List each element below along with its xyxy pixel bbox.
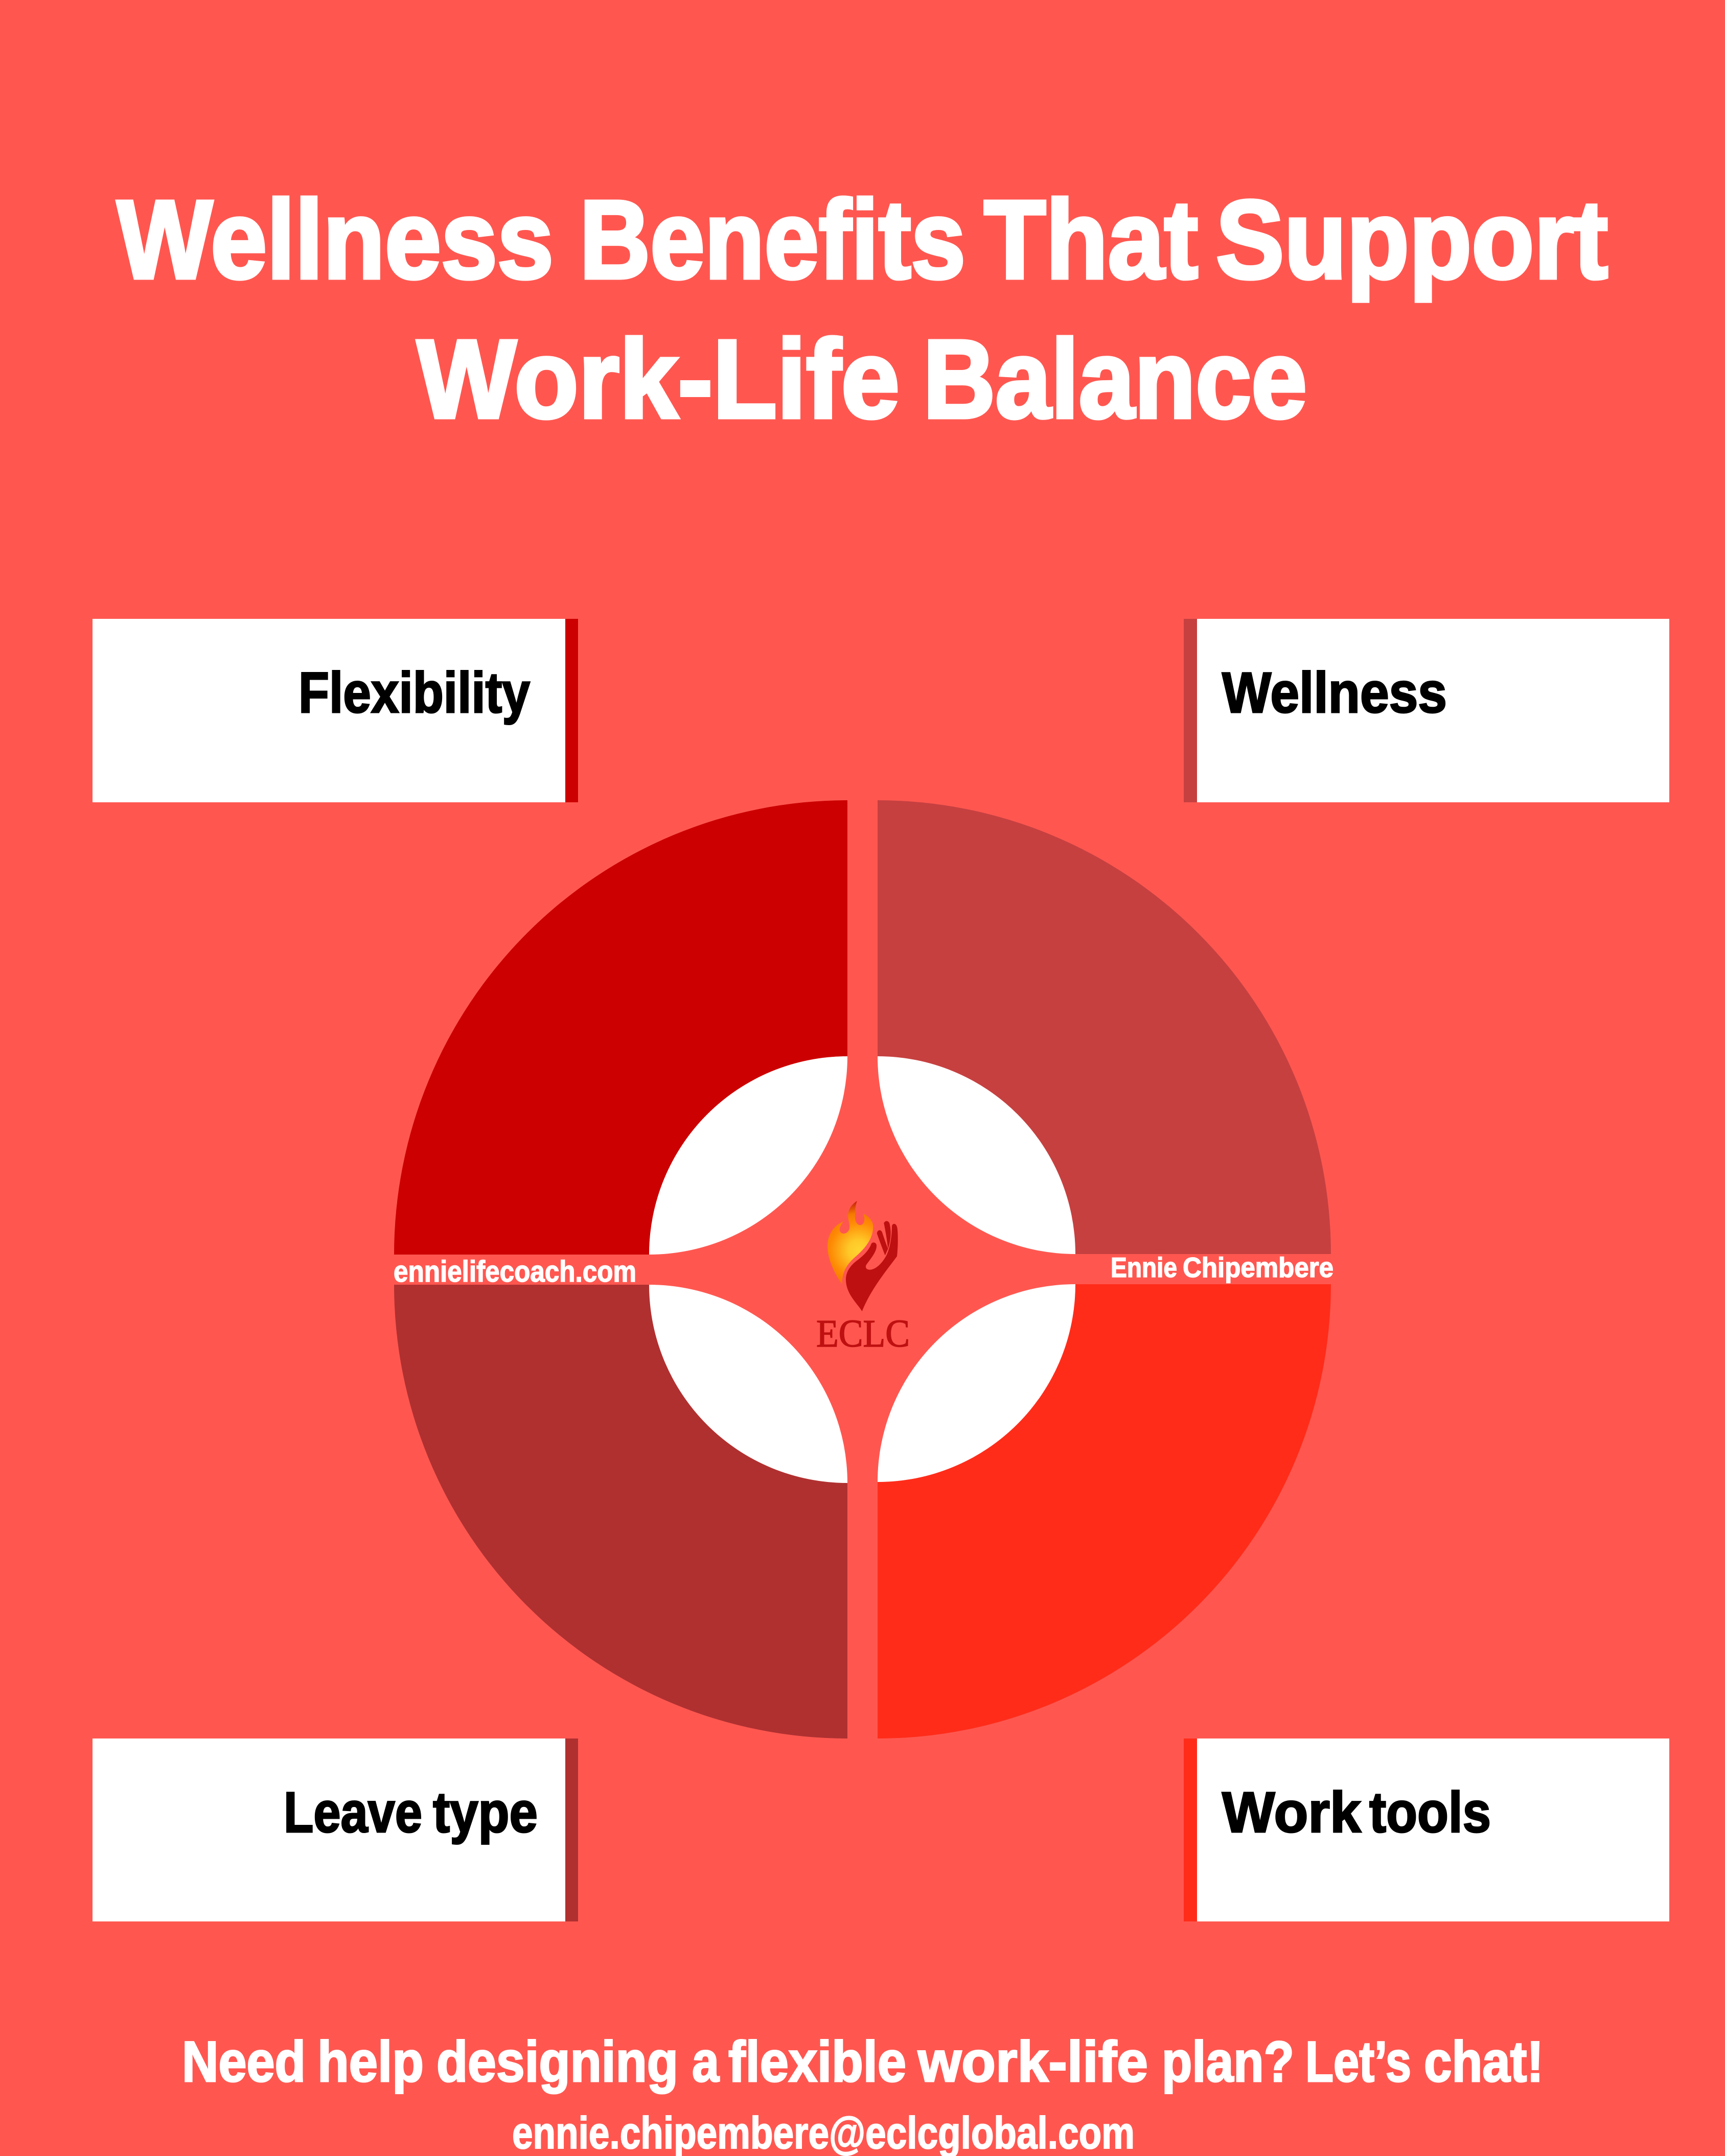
ring segment: flexibility xyxy=(394,800,847,1255)
card: Work tools: tools xyxy=(1369,1780,1491,1844)
card: Wellness xyxy=(1184,619,1669,802)
icon: hand xyxy=(846,1221,898,1311)
title: That xyxy=(984,178,1198,302)
card: Work tools: Work xyxy=(1222,1780,1362,1844)
ring segment: leave type xyxy=(394,1285,847,1738)
title: Support xyxy=(1216,178,1608,302)
card: Leave type xyxy=(93,1738,578,1921)
title: Wellness xyxy=(117,178,554,302)
title: Balance xyxy=(923,317,1307,442)
call to action: designing xyxy=(436,2030,678,2094)
website label: ennielifecoach.com xyxy=(394,1255,636,1288)
logo wordmark: ECLC xyxy=(816,1312,910,1355)
white petal: top left xyxy=(649,1056,847,1255)
title: Work-Life xyxy=(417,317,900,442)
call to action: a xyxy=(692,2030,720,2094)
card: Flexibility xyxy=(93,619,578,802)
ring segment: wellness xyxy=(878,800,1331,1254)
call to action: plan? xyxy=(1162,2030,1294,2094)
call to action: Need xyxy=(182,2030,306,2094)
white petal: bottom right xyxy=(878,1284,1075,1482)
white petal: bottom left xyxy=(649,1285,847,1483)
call to action: Let’s xyxy=(1305,2030,1411,2094)
card: Wellness: Wellness xyxy=(1222,661,1447,725)
icon: flame xyxy=(827,1201,873,1284)
name label: Chipembere xyxy=(1183,1251,1333,1283)
ring segment: work tools xyxy=(878,1284,1331,1738)
white petal: top right xyxy=(878,1056,1075,1254)
card: Leave type: Leave xyxy=(284,1780,422,1844)
call to action: chat! xyxy=(1424,2030,1544,2094)
title: Benefits xyxy=(580,178,965,302)
call to action: work-life xyxy=(917,2030,1148,2094)
name label: Ennie xyxy=(1111,1251,1177,1283)
call to action xyxy=(182,2030,1544,2094)
logo: ECLC xyxy=(816,1201,910,1355)
call to action: flexible xyxy=(728,2030,906,2094)
name label xyxy=(1111,1251,1333,1283)
card: Leave type: type xyxy=(433,1780,538,1844)
card: Work tools xyxy=(1184,1738,1669,1921)
call to action: help xyxy=(317,2030,424,2094)
ring diagram xyxy=(394,800,1331,1738)
card: Flexibility: Flexibility xyxy=(298,661,530,725)
title xyxy=(117,178,1608,442)
